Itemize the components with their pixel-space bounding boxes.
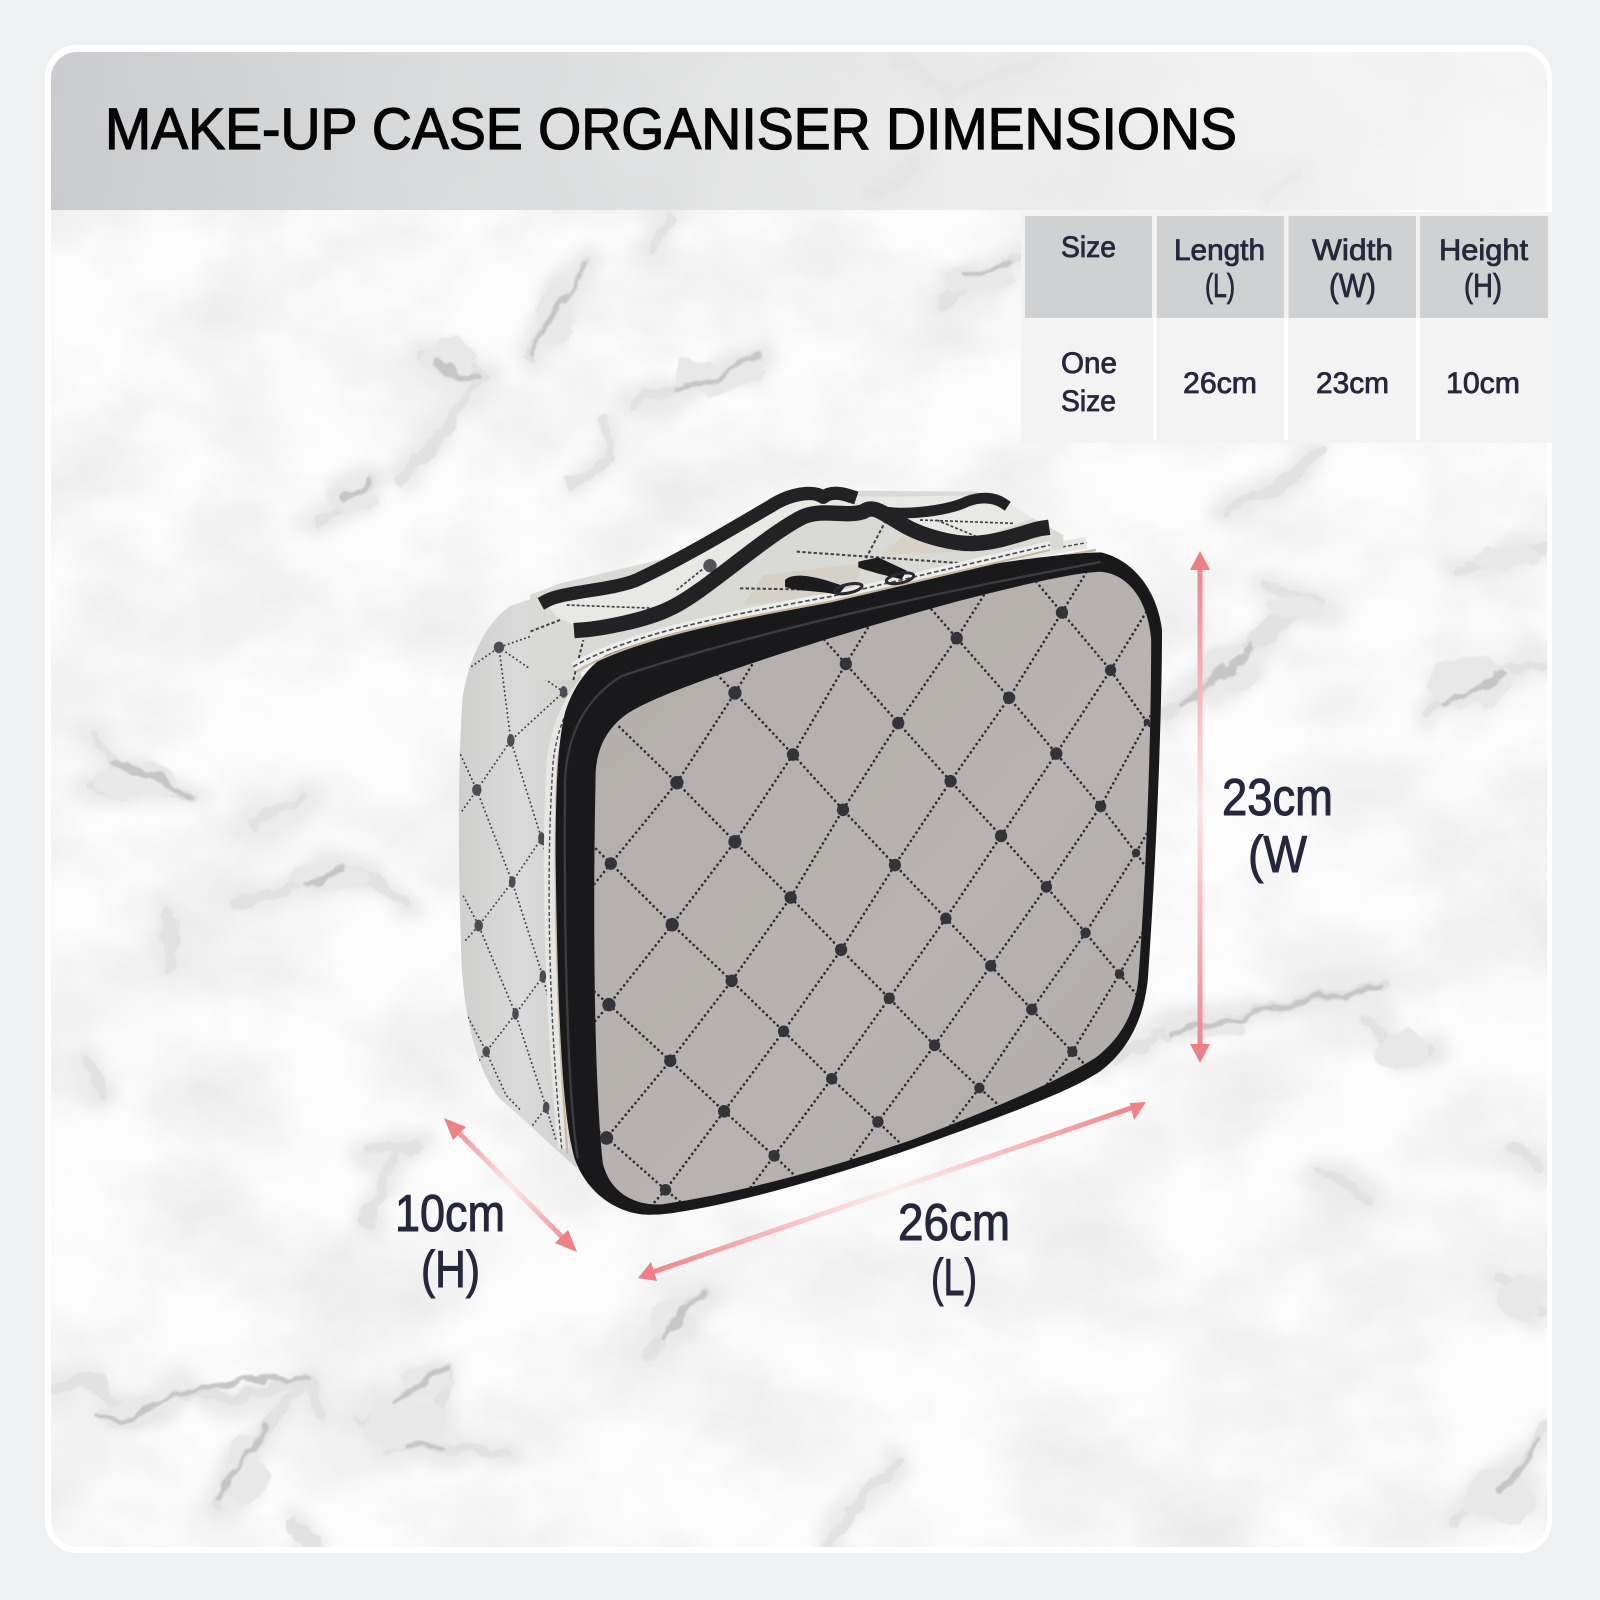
table header: width: (W) [1329, 267, 1376, 304]
label: 26cm length: (L) [931, 1249, 977, 1307]
label: 26cm length: 26cm [898, 1194, 1010, 1252]
zip pulls [785, 557, 915, 596]
table row label: one size: One [1061, 347, 1117, 380]
label: 23cm width [1222, 769, 1333, 884]
top panel, zip and handle [530, 490, 1063, 680]
title: MAKE-UP CASE ORGANISER DIMENSIONS [105, 97, 1237, 162]
black zipper band [556, 552, 1162, 1215]
arrow: length dimension [638, 1102, 1146, 1281]
table header: height: (H) [1464, 267, 1502, 304]
front face [594, 572, 1152, 1204]
label: 10cm height [395, 1185, 505, 1299]
table header: width [1312, 234, 1393, 304]
case body [459, 533, 1186, 1231]
label: 26cm length [898, 1194, 1010, 1307]
label: 23cm width: 23cm [1222, 769, 1333, 827]
table row label: one size: Size [1061, 385, 1116, 418]
label: 23cm width: (W [1248, 826, 1307, 884]
arrow: height dimension [444, 1118, 577, 1252]
table header: height: Height [1439, 234, 1529, 267]
title bar [51, 52, 1547, 210]
table header: height [1439, 234, 1529, 304]
table row label: one size [1061, 347, 1117, 418]
make-up case photo illustration [459, 490, 1186, 1231]
size table [1021, 212, 1552, 443]
table header: size: Size [1061, 231, 1116, 264]
table value: width: 23cm [1316, 367, 1389, 400]
quilted diamond pattern [594, 572, 1150, 1204]
label: 10cm height: 10cm [395, 1185, 505, 1243]
handle strap [540, 492, 1033, 627]
table header: length: Length [1174, 234, 1265, 267]
side panel [459, 589, 591, 1168]
cream seam and stitching [549, 543, 1096, 1153]
table value: height: 10cm [1446, 367, 1520, 400]
top panel [530, 490, 1063, 680]
arrow: width dimension [1190, 551, 1210, 1063]
table header: width: Width [1312, 234, 1393, 267]
table header: length: (L) [1205, 267, 1235, 304]
table header: length [1174, 234, 1265, 304]
label: 10cm height: (H) [421, 1241, 480, 1299]
table value: length: 26cm [1183, 367, 1257, 400]
